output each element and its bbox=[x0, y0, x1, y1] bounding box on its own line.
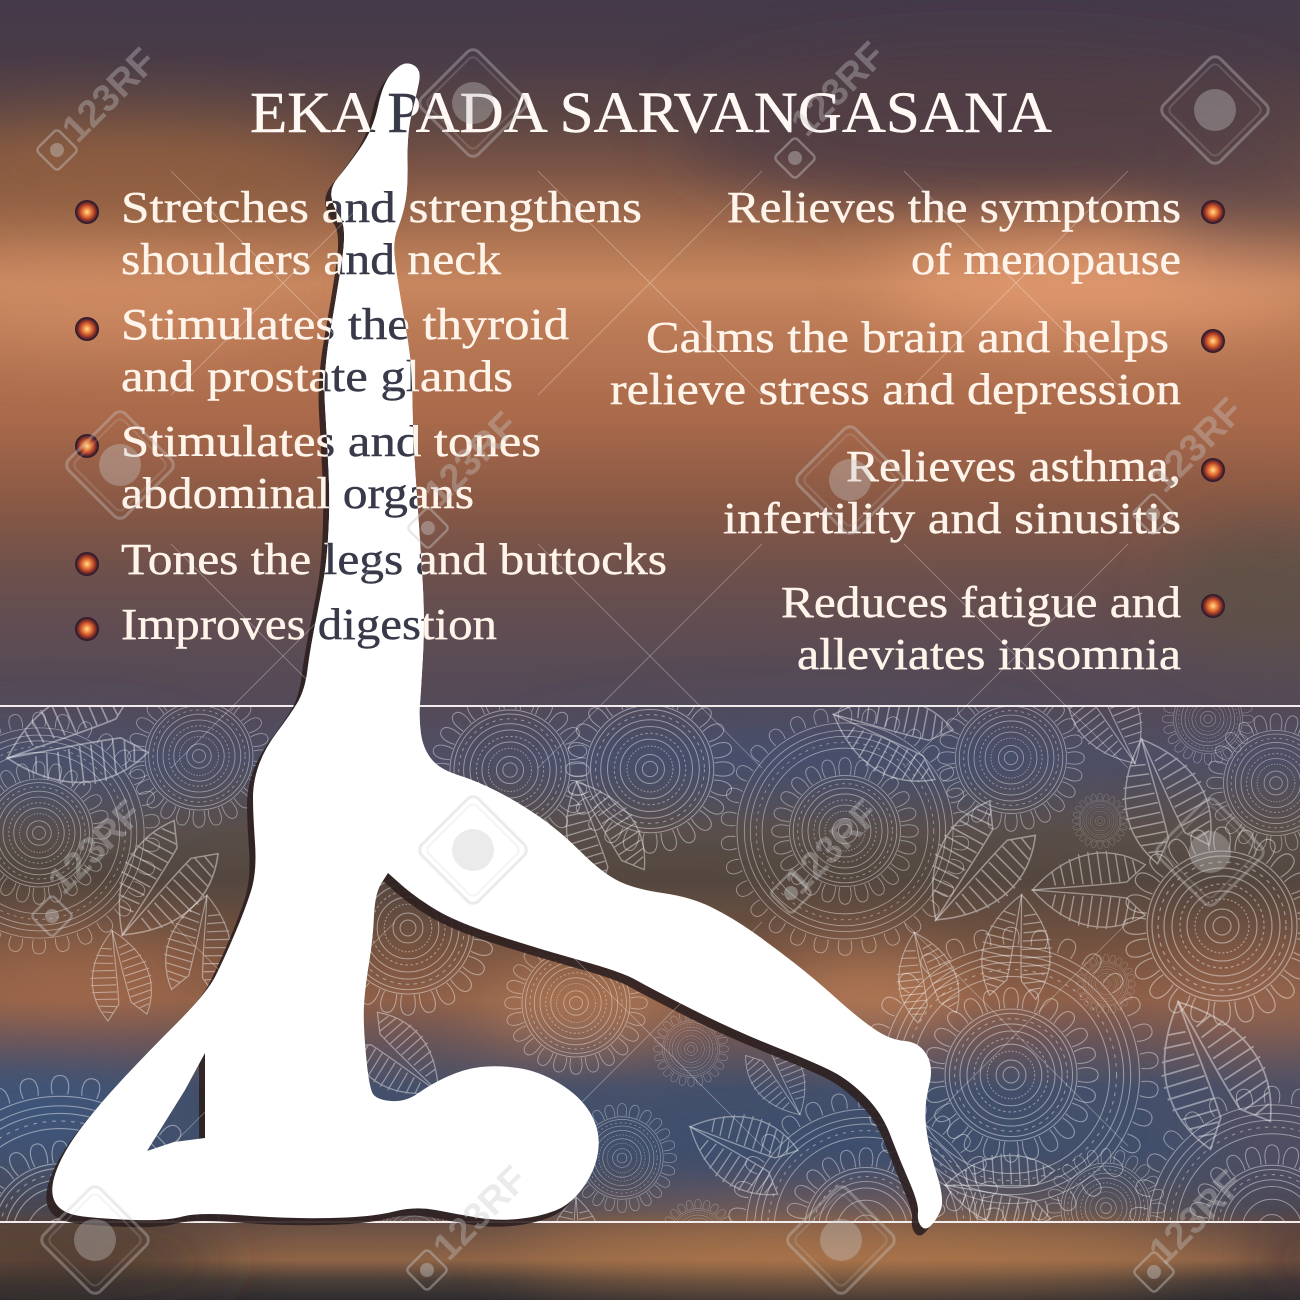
stock photo watermarks: 123RF bbox=[40, 792, 151, 903]
watermark cross lines bbox=[171, 171, 1128, 1146]
left benefits list: Improves digestion bbox=[121, 600, 497, 649]
stock photo watermarks: 123RF bbox=[1141, 1162, 1252, 1273]
left benefits list: Stretches and strengthens bbox=[121, 183, 642, 232]
right benefits list: relieve stress and depression bbox=[610, 365, 1181, 414]
stock photo watermarks: 123RF bbox=[425, 1158, 536, 1269]
band border top bbox=[0, 705, 1300, 707]
title: EKA PADA SARVANGASANA bbox=[250, 80, 1052, 145]
right benefits list: alleviates insomnia bbox=[797, 630, 1181, 679]
stock photo watermarks: 123RF bbox=[783, 34, 894, 145]
stock photo watermarks: 123RF bbox=[416, 404, 527, 515]
left benefits list: abdominal organs bbox=[121, 469, 474, 518]
right benefits list: Calms the brain and helps bbox=[646, 313, 1169, 362]
stock photo watermarks: 123RF bbox=[54, 40, 165, 151]
right benefits list: Reduces fatigue and bbox=[781, 578, 1181, 627]
right list bullets bbox=[1201, 200, 1225, 618]
title and list text where it crosses the silhouette bbox=[299, 64, 424, 700]
title and list text where it crosses the silhouette: abdominal organs bbox=[121, 469, 474, 518]
silhouette drop shadow bbox=[46, 70, 936, 1236]
right benefits list: infertility and sinusitis bbox=[723, 494, 1181, 543]
left benefits list: Tones the legs and buttocks bbox=[121, 535, 667, 584]
right benefits list: Relieves asthma, bbox=[846, 442, 1181, 491]
paisley ornament band bbox=[0, 707, 1300, 1221]
title and list text where it crosses the silhouette: Improves digestion bbox=[121, 600, 497, 649]
title and list text where it crosses the silhouette: shoulders and neck bbox=[121, 235, 501, 284]
title and list text where it crosses the silhouette: and prostate glands bbox=[121, 352, 513, 401]
title and list text where it crosses the silhouette: EKA PADA SARVANGASANA bbox=[250, 80, 1052, 145]
left benefits list: shoulders and neck bbox=[121, 235, 501, 284]
left benefits list bbox=[121, 183, 667, 649]
left benefits list: Stimulates the thyroid bbox=[121, 300, 569, 349]
stock photo watermarks: 123RF bbox=[777, 792, 888, 903]
left benefits list: and prostate glands bbox=[121, 352, 513, 401]
stock photo watermarks: 123RF bbox=[1141, 390, 1252, 501]
band border bottom bbox=[0, 1221, 1300, 1223]
white yoga pose silhouette bbox=[52, 63, 942, 1229]
right benefits list: Relieves the symptoms bbox=[727, 183, 1181, 232]
title and list text where it crosses the silhouette: Stimulates the thyroid bbox=[121, 300, 569, 349]
title and list text where it crosses the silhouette: Stimulates and tones bbox=[121, 417, 541, 466]
left benefits list: Stimulates and tones bbox=[121, 417, 541, 466]
title and list text where it crosses the silhouette: Stretches and strengthens bbox=[121, 183, 642, 232]
right benefits list: of menopause bbox=[911, 235, 1181, 284]
left list bullets bbox=[75, 200, 99, 641]
right benefits list bbox=[610, 183, 1181, 679]
title and list text where it crosses the silhouette: Tones the legs and buttocks bbox=[121, 535, 667, 584]
